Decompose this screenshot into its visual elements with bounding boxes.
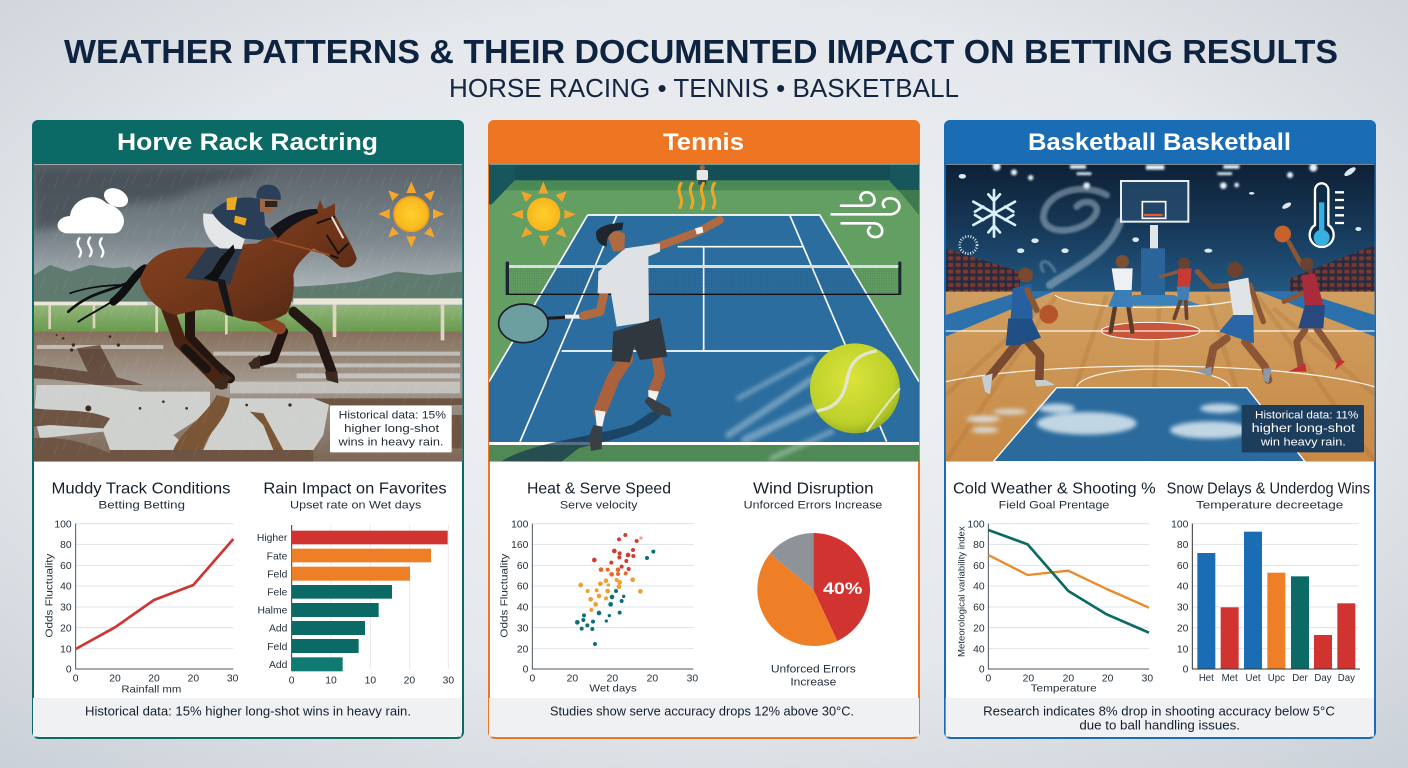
- scatter chart: serve velocity: Wet days: [589, 684, 637, 695]
- bar chart: upset rate: Feld: [267, 569, 288, 580]
- bar chart: upset rate: Fate: [267, 551, 288, 562]
- callout: historical data: higher long-shot: [344, 423, 439, 435]
- line chart: odds fluctuation: Odds Fluctuality: [44, 553, 55, 638]
- panel: basketball: [944, 120, 1376, 738]
- scatter chart: serve velocity: 20: [607, 673, 618, 684]
- bar chart: temperature decrease: Day: [1314, 673, 1332, 684]
- callout: historical data: [1242, 405, 1364, 452]
- scatter heading: Heat & Serve Speed: [527, 480, 671, 497]
- ceiling lights: [993, 163, 1317, 189]
- panel header: [32, 120, 464, 164]
- charts area: tennis: [489, 480, 919, 737]
- line chart: field goal percentage: 20: [1102, 673, 1114, 684]
- snow specks: [959, 166, 1361, 253]
- icon: small snowflake: [960, 236, 977, 254]
- panel header: [488, 120, 920, 164]
- panel card: [33, 121, 463, 738]
- scatter chart: serve velocity: 160: [511, 540, 529, 551]
- subtitle: HORSE RACING • TENNIS • BASKETBALL: [449, 73, 959, 103]
- icon: thermometer: [1310, 183, 1344, 247]
- scatter chart: serve velocity: 60: [517, 582, 529, 593]
- line chart: field goal percentage: [956, 519, 1153, 695]
- scatter chart: serve velocity: 60: [517, 561, 529, 572]
- icon: sun: [511, 182, 576, 247]
- line chart: field goal percentage: 20: [1023, 673, 1034, 684]
- line chart: field goal percentage: Temperature: [1031, 684, 1097, 695]
- line chart: field goal percentage: 40: [973, 644, 985, 655]
- charts area: basketball: [946, 480, 1374, 737]
- scatter chart: serve velocity: 0: [529, 673, 535, 684]
- line chart: odds fluctuation: 10: [60, 644, 72, 655]
- pie heading: Wind Disruption: [753, 480, 874, 497]
- bar chart: upset rate: 20: [404, 676, 415, 687]
- bar chart: upset rate: 0: [289, 676, 295, 687]
- panel header: [944, 120, 1376, 164]
- line chart: odds fluctuation: 0: [73, 673, 79, 684]
- callout: historical data: win heavy rain.: [1260, 436, 1346, 448]
- footer note: [489, 698, 919, 737]
- bar chart: temperature decrease: 10: [1177, 644, 1189, 655]
- line chart heading: Cold Weather & Shooting %: [953, 480, 1156, 497]
- bar chart subheading: Upset rate on Wet days: [290, 499, 422, 511]
- scatter chart: serve velocity: 0: [523, 665, 529, 676]
- player: right defender: [1195, 262, 1272, 383]
- horse tail: [68, 268, 145, 322]
- pie chart: unforced errors: Increase: [790, 677, 836, 689]
- callout: historical data: [330, 406, 452, 452]
- footer note: due to ball handling issues.: [1079, 718, 1240, 732]
- horse body: [140, 200, 357, 322]
- scatter chart: serve velocity: Odds Fluctuality: [499, 553, 510, 638]
- bar chart: upset rate: 10: [325, 676, 337, 687]
- player shadow: [502, 412, 662, 462]
- callout: historical data: Historical data: 15%: [339, 409, 446, 421]
- bar chart: upset rate: Higher: [257, 533, 288, 544]
- backboard and hoop: [1121, 181, 1188, 295]
- line chart: odds fluctuation: Rainfall mm: [121, 684, 181, 695]
- line chart: field goal percentage: 0: [979, 665, 985, 676]
- line chart: odds fluctuation: 0: [66, 665, 72, 676]
- line chart: field goal percentage: 20: [973, 623, 985, 634]
- line chart: odds fluctuation: 80: [60, 540, 72, 551]
- bar chart: temperature decrease: 20: [1177, 623, 1189, 634]
- bar chart: temperature decrease: 60: [1177, 561, 1189, 572]
- bar chart: upset rate: 30: [443, 676, 454, 687]
- footer note: Research indicates 8% drop in shooting accuracy below 5°C: [983, 704, 1335, 718]
- callout: historical data: wins in heavy rain.: [337, 436, 443, 448]
- bar chart: temperature decrease: Met: [1222, 673, 1238, 684]
- line chart subheading: Betting Betting: [98, 499, 185, 511]
- illustration: horse on muddy track: [34, 164, 462, 462]
- line chart: odds fluctuation: 20: [148, 673, 160, 684]
- wind swirl: [1041, 189, 1120, 285]
- line chart: odds fluctuation: 30: [60, 603, 72, 614]
- ball motion streaks: [728, 358, 832, 458]
- panel heading: Horve Rack Ractring: [117, 129, 378, 156]
- bar chart: upset rate: Halme: [257, 606, 288, 617]
- bar chart: temperature decrease: Upc: [1268, 673, 1285, 684]
- footer note: Studies show serve accuracy drops 12% above 30°C.: [550, 704, 854, 718]
- player: left with ball: [982, 268, 1058, 394]
- line chart: field goal percentage: 60: [973, 603, 985, 614]
- scatter chart: serve velocity: 100: [511, 519, 529, 530]
- icon: sun: [378, 182, 444, 248]
- line chart: odds fluctuation: [44, 519, 239, 695]
- bar chart: upset rate: Add: [269, 624, 288, 635]
- line chart: field goal percentage: 0: [985, 673, 991, 684]
- tennis ball: [810, 343, 900, 433]
- icon: snowflake: [973, 190, 1015, 237]
- title: WEATHER PATTERNS & THEIR DOCUMENTED IMPACT ON BETTING RESULTS: [64, 33, 1338, 70]
- scatter chart: serve velocity: 30: [687, 673, 698, 684]
- bar chart: upset rate: 10: [365, 676, 376, 687]
- scatter subheading: Serve velocity: [560, 499, 638, 511]
- scatter chart: serve velocity: 40: [517, 603, 529, 614]
- line chart: odds fluctuation: 60: [60, 561, 72, 572]
- panel card: [489, 121, 919, 738]
- panel: horse racing: [32, 120, 464, 738]
- bar chart: temperature decrease: Uet: [1245, 673, 1261, 684]
- line chart: field goal percentage: 80: [973, 540, 985, 551]
- line chart: field goal percentage: 40: [973, 582, 985, 593]
- footer note: Historical data: 15% higher long-shot wins in heavy rain.: [85, 704, 411, 718]
- distant player: [697, 165, 708, 185]
- line chart: odds fluctuation: 20: [109, 673, 121, 684]
- icon: wind: [832, 192, 899, 237]
- scatter chart: serve velocity: 20: [567, 673, 578, 684]
- player: centre white: [1108, 255, 1133, 332]
- racket: [499, 304, 580, 343]
- panel heading: Basketball Basketball: [1028, 129, 1291, 156]
- scatter chart: serve velocity: 30: [517, 623, 529, 634]
- heat waves icon: [679, 183, 715, 209]
- bar chart: temperature decrease: 40: [1177, 582, 1189, 593]
- bar chart: upset rate: Feld: [267, 642, 288, 653]
- player: centre red: [1161, 258, 1192, 318]
- scatter chart: serve velocity: [499, 519, 698, 695]
- line chart: odds fluctuation: 30: [227, 673, 239, 684]
- line chart: field goal percentage: 60: [973, 561, 985, 572]
- panel card: [945, 121, 1375, 738]
- bar chart: temperature decrease: 80: [1177, 540, 1189, 551]
- bar chart: upset rate: Fele: [267, 588, 288, 599]
- bar chart: upset rate: [257, 525, 454, 687]
- scatter chart: serve velocity: 20: [647, 673, 658, 684]
- bar chart: temperature decrease: [1171, 519, 1360, 684]
- panel: tennis: [488, 120, 920, 738]
- illustration: tennis court: [489, 164, 919, 462]
- line chart: odds fluctuation: 20: [60, 623, 72, 634]
- callout: historical data: Historical data: 11%: [1255, 409, 1359, 421]
- line chart: field goal percentage: 100: [967, 519, 985, 530]
- bar chart subheading: Temperature decreetage: [1196, 499, 1343, 511]
- panel heading: Tennis: [663, 129, 744, 156]
- bar chart heading: Snow Delays & Underdog Wins: [1167, 480, 1370, 497]
- player: right shooter: [1274, 226, 1345, 372]
- callout: historical data: higher long-shot: [1252, 421, 1356, 435]
- bar chart: temperature decrease: 100: [1171, 519, 1189, 530]
- line chart: odds fluctuation: 20: [188, 673, 199, 684]
- bar chart: temperature decrease: Der: [1292, 673, 1309, 684]
- bar chart heading: Rain Impact on Favorites: [263, 480, 447, 497]
- scatter chart: serve velocity: 20: [517, 644, 529, 655]
- bar chart: temperature decrease: 30: [1177, 603, 1189, 614]
- pie chart: unforced errors: Unforced Errors: [771, 663, 856, 675]
- net: [506, 262, 901, 295]
- line chart subheading: Field Goal Prentage: [999, 499, 1109, 511]
- bar chart: temperature decrease: Het: [1199, 673, 1214, 684]
- line chart: field goal percentage: 20: [1063, 673, 1074, 684]
- pie subheading: Unforced Errors Increase: [744, 499, 882, 511]
- line chart: odds fluctuation: 100: [54, 519, 72, 530]
- charts area: horse racing: [33, 480, 461, 737]
- line chart heading: Muddy Track Conditions: [51, 480, 231, 497]
- bar chart: upset rate: Add: [269, 660, 288, 671]
- jockey and saddle: [185, 245, 243, 285]
- icon: rain cloud: [58, 184, 131, 257]
- player: [583, 220, 720, 451]
- bar chart: temperature decrease: 0: [1183, 665, 1189, 676]
- bar chart: temperature decrease: Day: [1338, 673, 1355, 684]
- horse legs: [165, 302, 332, 383]
- pie chart: unforced errors: 40%: [823, 579, 863, 598]
- footer note: [33, 698, 461, 737]
- line chart: field goal percentage: Meteorological variability index: [956, 526, 966, 657]
- line chart: odds fluctuation: 40: [60, 582, 72, 593]
- pie chart: unforced errors: [757, 533, 870, 689]
- footer note: [946, 698, 1374, 737]
- line chart: field goal percentage: 30: [1142, 673, 1153, 684]
- illustration: basketball arena: [946, 163, 1375, 462]
